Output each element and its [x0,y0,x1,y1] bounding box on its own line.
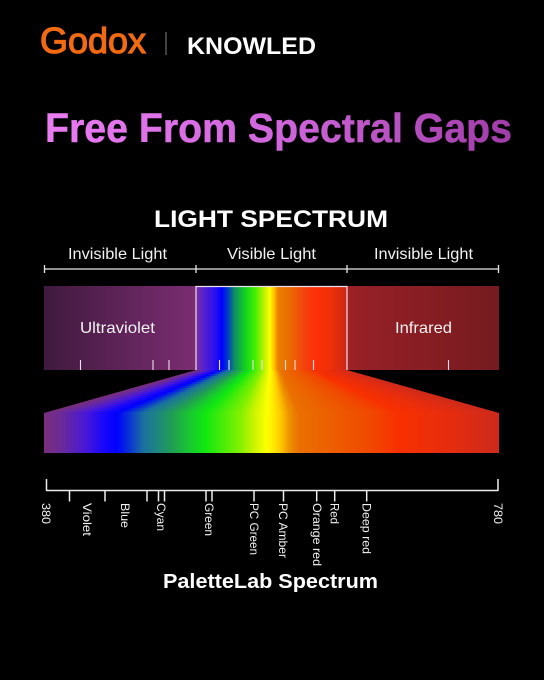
logo: KNOWLED: KNOWLED [187,33,316,60]
range bracket [44,265,499,273]
range labels: Visible Light [227,246,317,263]
label: infrared: Infrared [395,320,452,337]
wavelength scale axis [46,479,498,502]
wavelength scale labels: 380 [39,503,53,524]
wavelength scale labels: 780 [491,503,505,524]
wavelength scale labels: Green [202,503,216,536]
panel: infrared band [347,286,499,370]
range labels: Invisible Light [374,246,474,263]
wavelength scale labels: Deep red [359,503,373,554]
visible band outline [196,286,347,370]
logo: Godox: Godox [40,20,146,61]
wavelength scale labels: Blue [118,503,132,528]
wavelength scale labels: Orange red [310,503,324,566]
caption: PaletteLab Spectrum: PaletteLab Spectrum [163,571,378,593]
wavelength scale labels: PC Amber [276,503,290,558]
logo divider [166,32,167,55]
wavelength scale labels: Red [327,503,341,524]
infographic canvas [41,26,511,592]
panel: visible band [196,286,347,370]
range labels [68,246,474,263]
panel: ultraviolet band [44,286,196,370]
band tick marks [80,360,448,370]
wavelength scale labels [39,503,505,566]
expanded spectrum fan [44,370,499,453]
range labels: Invisible Light [68,246,168,263]
wavelength scale labels: Violet [80,503,94,537]
heading: light spectrum: LIGHT SPECTRUM [154,206,388,233]
wavelength scale labels: Cyan [154,503,168,531]
title: Free From Spectral Gaps [45,105,512,151]
label: ultraviolet: Ultraviolet [80,320,156,337]
wavelength scale labels: PC Green [247,503,261,555]
